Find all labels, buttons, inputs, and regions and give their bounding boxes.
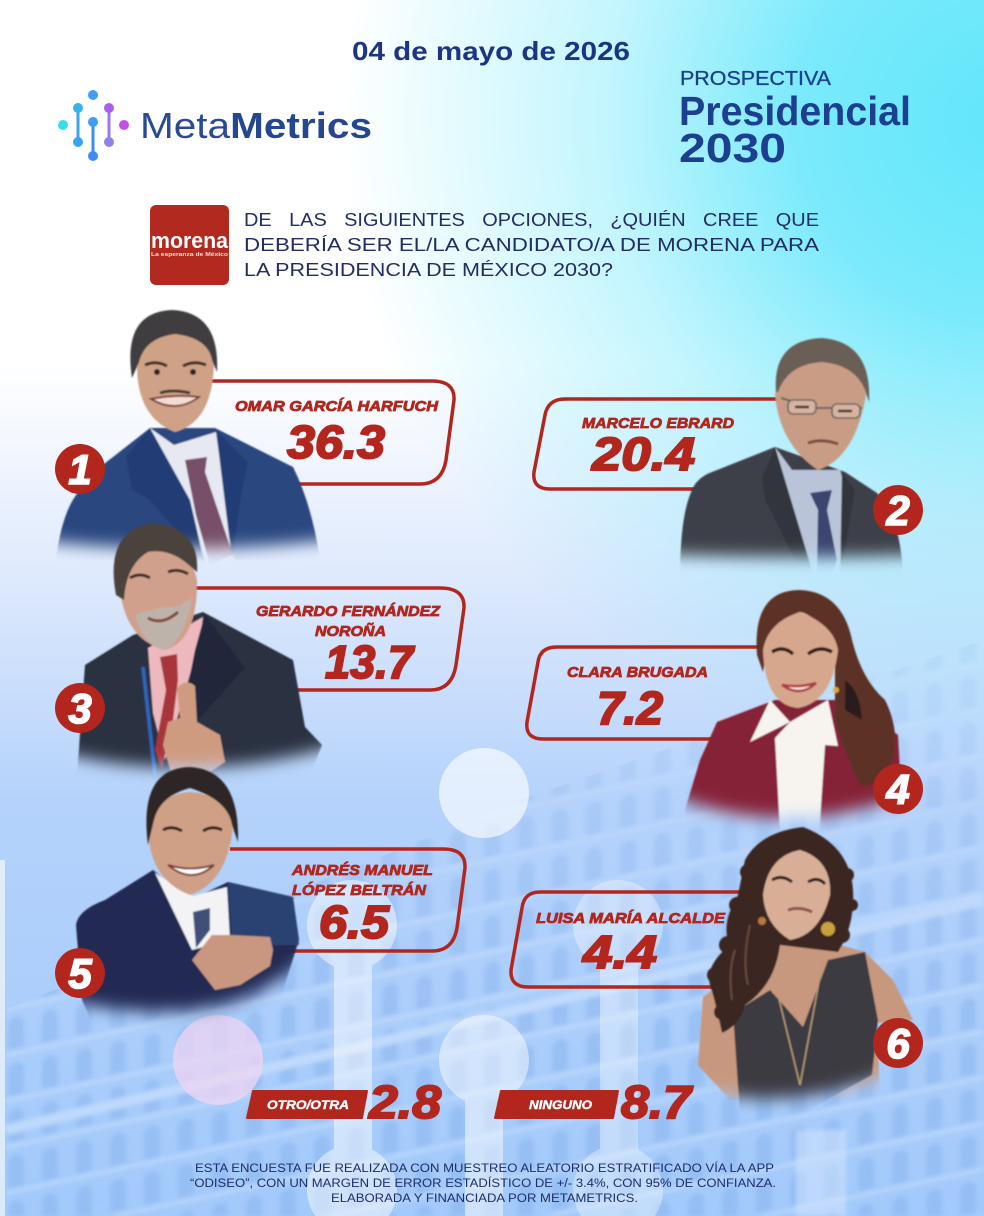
icon: MetaMetrics network [58,90,129,161]
badge 1 [55,444,105,494]
background: left edge strip [0,860,5,1216]
icon: morena party logo: morena [151,228,229,253]
value: 6.5 [319,896,391,948]
panel: Gerardo Fernández Noroña [76,523,464,800]
footer note: ELABORADA Y FINANCIADA POR METAMETRICS. [331,1193,638,1205]
background: logo motif of circles and stems [307,880,529,1216]
card outline [195,588,464,690]
value: 2.8 [368,1076,441,1128]
portrait [680,338,903,582]
question: DEBERÍA SER EL/LA CANDIDATO/A DE MORENA PARA [244,234,820,255]
label pill [495,1091,618,1118]
footer note [190,1162,776,1205]
panel: Andrés Manuel López Beltrán [76,767,465,1040]
background: pink circle [173,1015,263,1105]
badge 6 [873,1018,923,1068]
badge 6: 6 [886,1020,910,1067]
badge 1: 1 [68,446,92,493]
icon: morena party logo [150,205,229,285]
panel: Omar García Harfuch [56,310,454,565]
background: palace facade [5,640,984,1216]
background: top circle [439,748,529,838]
badge 3: 3 [68,685,92,732]
badge 2: 2 [885,487,910,534]
card outline [511,892,745,987]
portrait [698,827,913,1115]
name: ANDRÉS MANUEL [291,862,433,879]
badge 4 [873,764,923,814]
logo: MetaMetrics [58,90,372,161]
background: motif right stem [573,880,663,1216]
name: MARCELO EBRARD [582,415,734,432]
footer note: ESTA ENCUESTA FUE REALIZADA CON MUESTREO ALEATORIO ESTRATIFICADO VÍA LA APP [195,1162,774,1175]
callout: Otro/Otra: OTRO/OTRA [267,1098,349,1112]
portrait [56,310,320,565]
badge 5 [55,948,105,998]
icon: morena party logo: La esperanza de México [151,252,229,258]
card outline [205,381,454,484]
title: Prospectiva Presidencial 2030: 2030 [679,125,786,171]
badge 2 [873,485,923,535]
name: LÓPEZ BELTRÁN [292,881,427,899]
value: 4.4 [582,926,657,978]
card outline [230,849,465,951]
panel: Clara Brugada [527,590,923,850]
value: 7.2 [597,682,663,734]
name [291,862,433,899]
callout: Ninguno: NINGUNO [529,1098,593,1112]
value: 36.3 [287,416,385,468]
name: CLARA BRUGADA [567,664,708,681]
badge 5: 5 [68,950,92,997]
question: DE LAS SIGUIENTES OPCIONES, ¿QUIÉN CREE QUE [244,209,819,230]
panel: Marcelo Ebrard [534,338,923,582]
value: 13.7 [325,636,415,688]
name [256,603,441,640]
badge 3 [55,683,105,733]
title: Prospectiva Presidencial 2030: PROSPECTIVA [680,68,832,90]
callout: Ninguno [495,1076,694,1128]
name: LUISA MARÍA ALCALDE [536,910,726,927]
title: Prospectiva Presidencial 2030: Presidencial [679,88,911,134]
portrait [685,590,901,850]
label pill [247,1091,367,1118]
name: OMAR GARCÍA HARFUCH [235,398,439,415]
card outline [534,399,785,489]
portrait [76,767,299,1040]
value: 8.7 [621,1076,694,1128]
wordmark: Meta Metrics [140,105,372,146]
value: 20.4 [591,428,695,480]
callout: Otro/Otra [247,1076,441,1128]
question [244,209,820,280]
title: Prospectiva Presidencial 2030 [679,68,911,171]
panel: Luisa María Alcalde [511,827,923,1115]
badge 4: 4 [885,766,910,813]
name: NOROÑA [315,622,386,640]
background: light doorway [796,1130,846,1216]
portrait [76,523,322,800]
question: LA PRESIDENCIA DE MÉXICO 2030? [244,259,613,280]
date: 04 de mayo de 2026 [352,36,630,66]
card outline [527,647,770,739]
name: GERARDO FERNÁNDEZ [256,603,441,620]
footer note: “ODISEO”, CON UN MARGEN DE ERROR ESTADÍSTICO DE +/- 3.4%, CON 95% DE CONFIANZA. [190,1177,776,1190]
